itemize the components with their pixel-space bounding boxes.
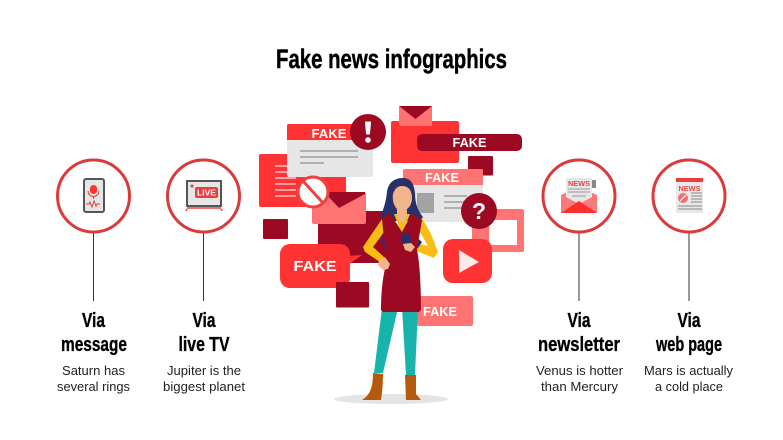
red rectangle top [391, 121, 459, 163]
icon: play button [443, 239, 492, 283]
legs [374, 308, 418, 375]
fake card right [403, 169, 483, 222]
heading line 2: live TV [178, 334, 230, 356]
dark square left [263, 219, 288, 239]
icon: prohibited sign [298, 177, 328, 207]
fake pink tag [417, 296, 473, 326]
description: Mars is actually [644, 363, 733, 378]
woman figure [362, 178, 438, 400]
dark square right [468, 156, 493, 176]
red document [259, 154, 346, 207]
dress [381, 213, 422, 312]
fake card top left: FAKE [312, 127, 346, 141]
fake pink tag: FAKE [423, 305, 457, 319]
dark square bottom [336, 282, 369, 308]
icon: news envelope [561, 178, 597, 213]
fake speech bubble [280, 244, 362, 288]
description: Venus is hotter [536, 363, 624, 378]
heading line 2: web page [655, 334, 722, 356]
icon: exclamation badge [350, 114, 386, 150]
heading: Via [82, 310, 106, 332]
title: Fake news infographics [276, 44, 507, 74]
icon: web news page [676, 178, 703, 213]
panel: via newsletter [536, 160, 624, 394]
heading: Via [568, 310, 591, 332]
dark fake bar [417, 134, 522, 151]
yellow blouse and arms [363, 214, 438, 262]
boots [362, 373, 421, 400]
ground shadow [334, 394, 448, 404]
icon: phone with microphone [84, 178, 104, 212]
pink frame [472, 209, 524, 252]
navy sleeves [382, 233, 422, 250]
description line 2: biggest planet [163, 379, 245, 394]
description: Saturn has [62, 363, 125, 378]
phone [401, 233, 411, 244]
description line 2: several rings [57, 379, 130, 394]
panel: via message [57, 160, 130, 394]
heading: Via [678, 310, 701, 332]
description line 2: than Mercury [541, 379, 618, 394]
circle with connector [543, 160, 615, 301]
icon: live television [186, 181, 222, 211]
icon: question badge [461, 193, 497, 229]
heading line 2: newsletter [538, 334, 620, 356]
circle with connector [653, 160, 725, 301]
big dark block [318, 211, 388, 263]
heading: Via [192, 310, 216, 332]
panel: via web page [644, 160, 733, 394]
icon: news envelope: NEWS [568, 179, 590, 188]
fake card top left [287, 124, 373, 177]
icon: question badge: ? [472, 198, 486, 224]
dark fake bar: FAKE [452, 136, 486, 150]
icon: live television: LIVE [197, 188, 217, 198]
icon: web news page: NEWS [678, 184, 700, 193]
fake card right: FAKE [425, 171, 459, 185]
hands [378, 242, 415, 270]
description: Jupiter is the [167, 363, 241, 378]
circle with connector [58, 160, 130, 301]
central illustration [259, 106, 524, 404]
pink envelope left [312, 192, 366, 224]
circle with connector [168, 160, 240, 301]
face and neck [393, 186, 412, 224]
heading line 2: message [61, 334, 127, 356]
hair [381, 178, 423, 221]
description line 2: a cold place [655, 379, 723, 394]
pink envelope top [399, 106, 432, 126]
panel: via live TV [163, 160, 245, 394]
fake speech bubble: FAKE [294, 259, 337, 275]
